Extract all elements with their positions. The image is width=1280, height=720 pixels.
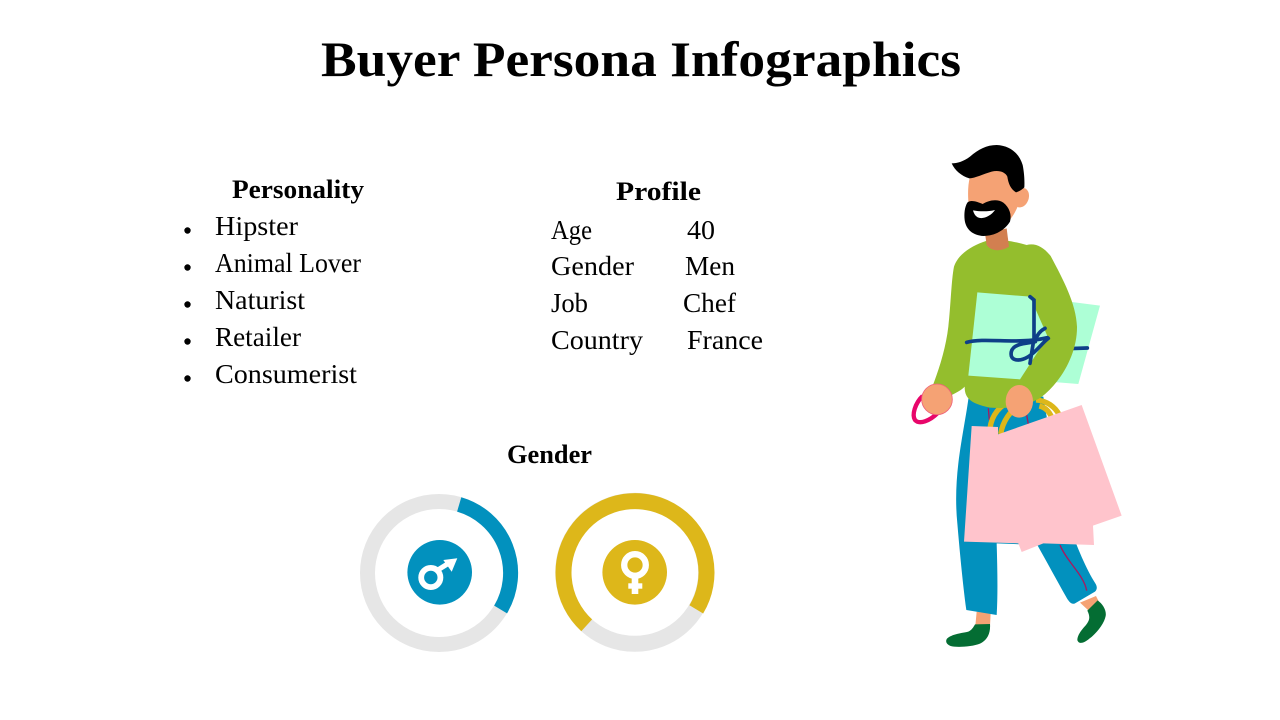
sweater [933, 240, 1077, 408]
gift box [1020, 297, 1100, 384]
chart: female donut [563, 501, 707, 644]
gift ribbon end [1067, 342, 1087, 354]
neck [985, 228, 1009, 250]
shoes [946, 600, 1106, 647]
shopping bags [964, 405, 1122, 552]
list: personality traits: Animal Lover [215, 248, 361, 278]
list: personality traits [184, 211, 361, 389]
ear [1011, 186, 1032, 210]
list: personality traits: Naturist [215, 285, 306, 315]
gift ribbon [967, 297, 1048, 363]
trouser stripe [988, 408, 1087, 591]
face [968, 168, 1020, 233]
profile row: age: 40 [687, 215, 715, 245]
list: personality traits: Hipster [215, 211, 298, 241]
profile row: gender [551, 251, 735, 281]
upper body [922, 145, 1077, 418]
icon: female symbol [624, 554, 646, 594]
profile row: gender: Gender [551, 251, 634, 281]
profile row: age: Age [551, 215, 592, 245]
profile row: country: Country [551, 325, 644, 355]
profile row: country: France [687, 325, 763, 355]
profile row: job [551, 288, 736, 318]
heading: personality: Personality [232, 175, 364, 204]
title: Buyer Persona Infographics [321, 31, 961, 87]
gift front panel [968, 292, 1048, 379]
profile row: country [551, 325, 763, 355]
profile row: gender: Men [685, 251, 735, 281]
list: personality traits: Consumerist [215, 359, 358, 389]
hand: right [1006, 385, 1033, 418]
heading: profile: Profile [616, 177, 701, 206]
handle: pink bag [914, 396, 937, 422]
profile row: age [551, 215, 715, 245]
trousers [956, 397, 1097, 615]
illustration: man with shopping bags [914, 145, 1122, 647]
mouth [973, 210, 995, 218]
ankles [975, 596, 1099, 626]
profile row: job: Chef [683, 288, 736, 318]
heading: gender: Gender [507, 440, 592, 469]
panel: profile [551, 177, 763, 355]
icon: male symbol [421, 558, 457, 587]
hair [952, 145, 1024, 192]
hand: left [922, 384, 952, 415]
bag handles [990, 400, 1059, 434]
lower body [914, 396, 1106, 647]
profile row: job: Job [551, 288, 588, 318]
beard [964, 200, 1011, 236]
chart: male donut [368, 502, 511, 644]
panel: personality [184, 175, 364, 389]
list: personality traits: Retailer [215, 322, 301, 352]
